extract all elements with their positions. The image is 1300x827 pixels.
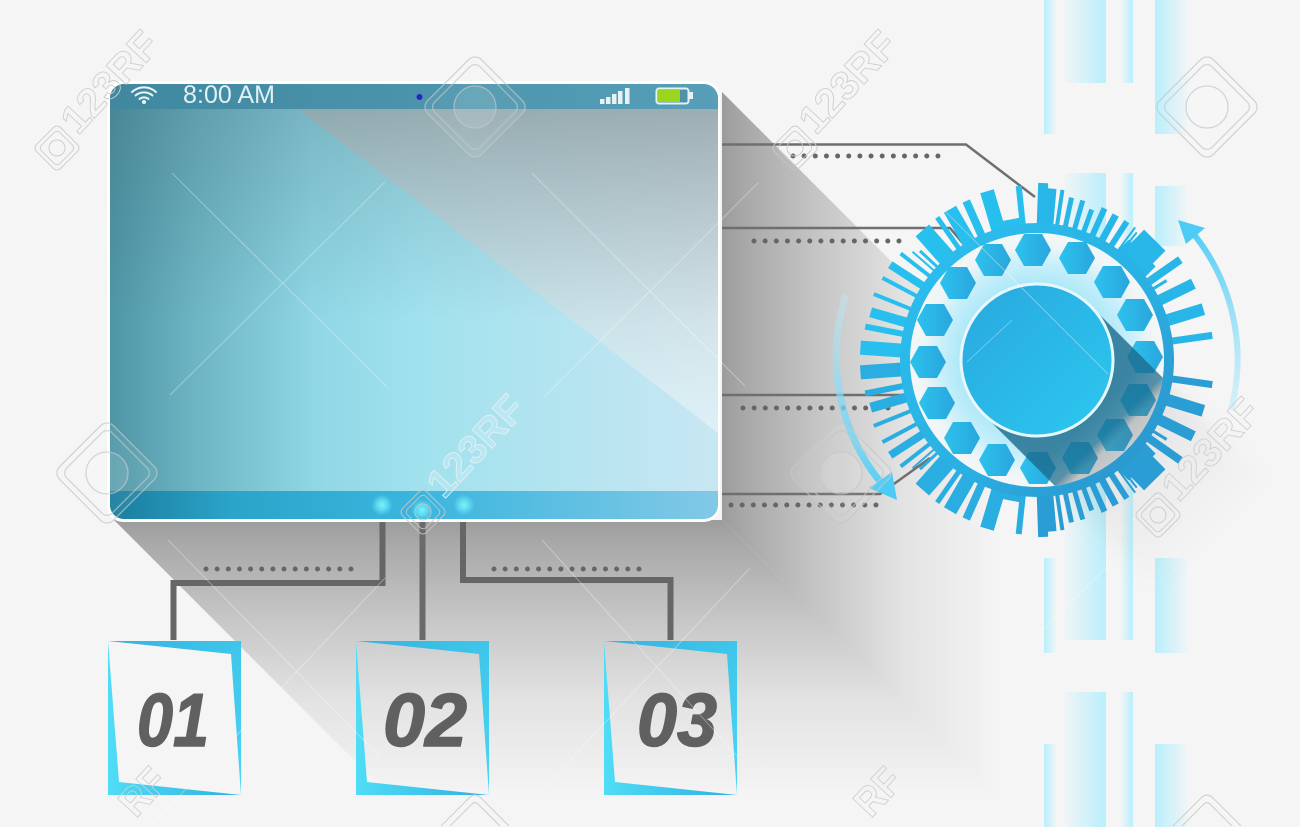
tablet long shadow xyxy=(114,92,1002,800)
gear dial xyxy=(860,182,1213,538)
icon: battery xyxy=(656,88,693,104)
watermark: 123RF top left xyxy=(33,23,168,172)
watermark: 123RF top right xyxy=(771,23,906,172)
card 02: 02 xyxy=(383,678,467,762)
thin diagonal highlight lines xyxy=(150,173,1108,827)
clock text: 8:00 AM xyxy=(183,81,275,109)
watermark: partial stamp bottom middle xyxy=(441,795,509,826)
ring spokes xyxy=(860,183,1213,537)
right connector lines with dotted rows xyxy=(722,144,1035,505)
watermark: 123RF top left: 123RF xyxy=(52,23,168,142)
tablet status bar xyxy=(110,84,718,109)
card 02 xyxy=(356,641,489,795)
watermark: 123RF right: 123RF xyxy=(1153,390,1269,509)
bottom connector lines with dotted rows xyxy=(174,522,670,640)
watermark: stamp left xyxy=(53,419,161,527)
clockwise arrow, left xyxy=(836,295,897,500)
tablet bottom bar xyxy=(110,491,718,519)
tablet screen xyxy=(110,84,718,519)
watermark: 123RF top right: 123RF xyxy=(790,23,906,142)
tablet device xyxy=(107,81,720,522)
dial inner long shadow xyxy=(991,314,1163,486)
icon: signal bars xyxy=(600,88,630,104)
watermark: 123RF center xyxy=(399,387,534,536)
card 03: 03 xyxy=(637,678,717,762)
camera dot xyxy=(416,94,422,100)
watermark: 123RF center: 123RF xyxy=(418,387,534,506)
icon: wifi xyxy=(132,87,156,104)
outer ring xyxy=(905,228,1169,492)
watermark: stamp top middle xyxy=(421,53,529,161)
card 01 xyxy=(108,641,241,795)
center disc xyxy=(961,284,1113,436)
decorative pale blue vertical light bands xyxy=(1044,0,1187,827)
card 03 xyxy=(604,641,737,795)
watermark: partial 123RF bottom right: RF xyxy=(845,759,911,825)
clockwise arrow, right xyxy=(1178,220,1238,410)
watermark: stamp center right xyxy=(787,419,895,527)
tablet frame xyxy=(107,81,720,522)
watermark: 123RF right xyxy=(1134,390,1269,539)
watermark: partial stamp bottom far right xyxy=(1173,795,1241,826)
watermark: stamp far right xyxy=(1153,53,1261,161)
dial soft outer shadow xyxy=(983,306,1262,585)
bottom bar glowing buttons xyxy=(371,494,475,521)
watermark: partial 123RF bottom left: RF xyxy=(110,759,176,825)
card 01: 01 xyxy=(137,678,209,762)
hexagon ring xyxy=(910,234,1163,484)
